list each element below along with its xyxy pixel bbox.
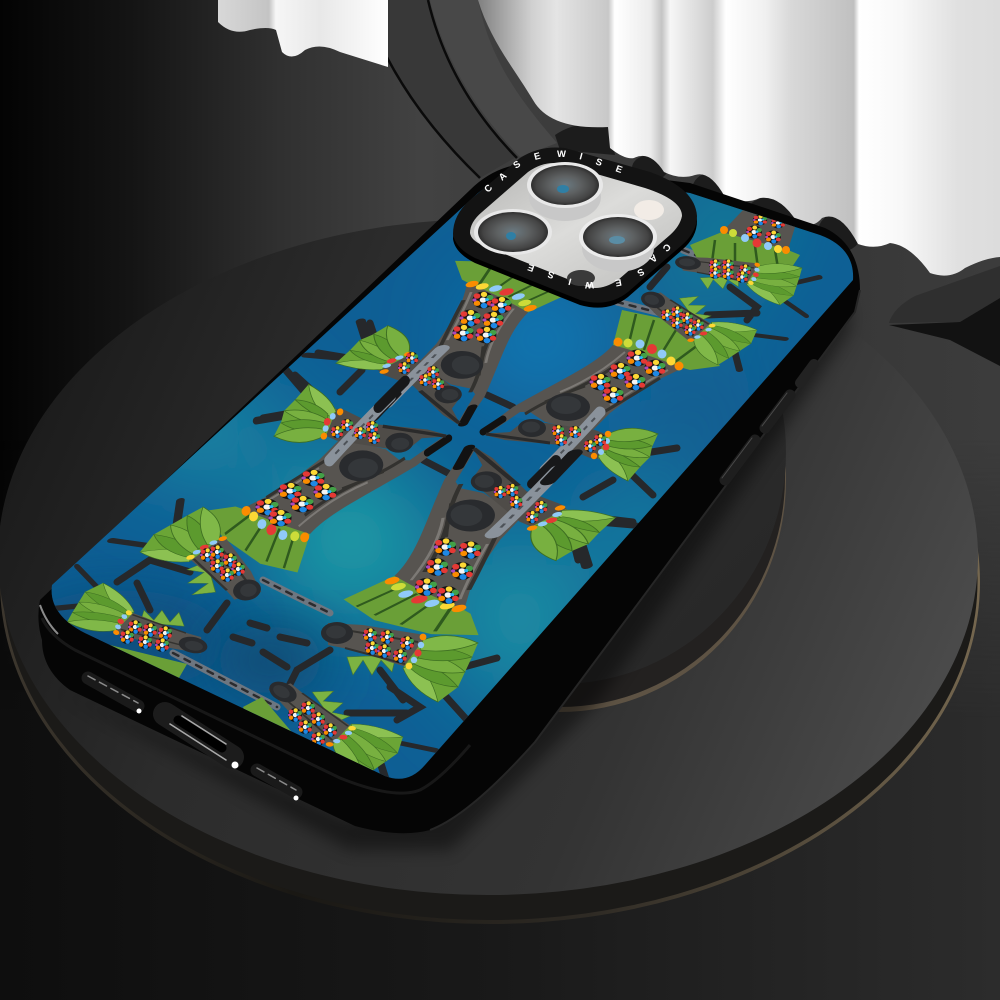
CASEWISE bottom lettering: CASEWISE	[526, 241, 673, 290]
flower clusters on outer arms	[120, 259, 751, 746]
camera glass	[470, 163, 682, 288]
bottom sensor	[567, 270, 595, 286]
case back artwork	[52, 190, 854, 779]
charging port	[165, 714, 238, 768]
bottom edge grass skirts	[110, 645, 292, 732]
camera bump	[453, 147, 697, 308]
side buttons	[722, 364, 814, 480]
flower clusters on inner arms	[331, 352, 606, 523]
outer leaf arms	[50, 255, 830, 794]
flower clusters on trunks	[255, 292, 665, 604]
artwork background	[52, 190, 854, 779]
bottom speaker port left	[88, 676, 142, 714]
phone case body	[38, 163, 860, 833]
shadow lumps below curtain	[555, 124, 862, 252]
top lens	[527, 162, 603, 221]
large disc pedestal	[0, 219, 980, 924]
curtain left piece	[218, 0, 388, 67]
branches and sticks	[117, 250, 757, 720]
bottom speaker port right	[257, 768, 298, 800]
small disc pedestal	[334, 220, 786, 712]
phone shadow	[60, 300, 850, 850]
top right trunk	[690, 210, 800, 270]
right stand	[889, 266, 1000, 366]
right lens	[579, 214, 657, 272]
dark curved arcs behind the phone	[363, 0, 557, 178]
curtain right piece	[478, 0, 1000, 276]
flash	[634, 200, 664, 220]
four large mirrored trees	[208, 260, 720, 636]
CASEWISE top lettering: CASEWISE	[482, 149, 624, 195]
left lens	[474, 209, 552, 255]
